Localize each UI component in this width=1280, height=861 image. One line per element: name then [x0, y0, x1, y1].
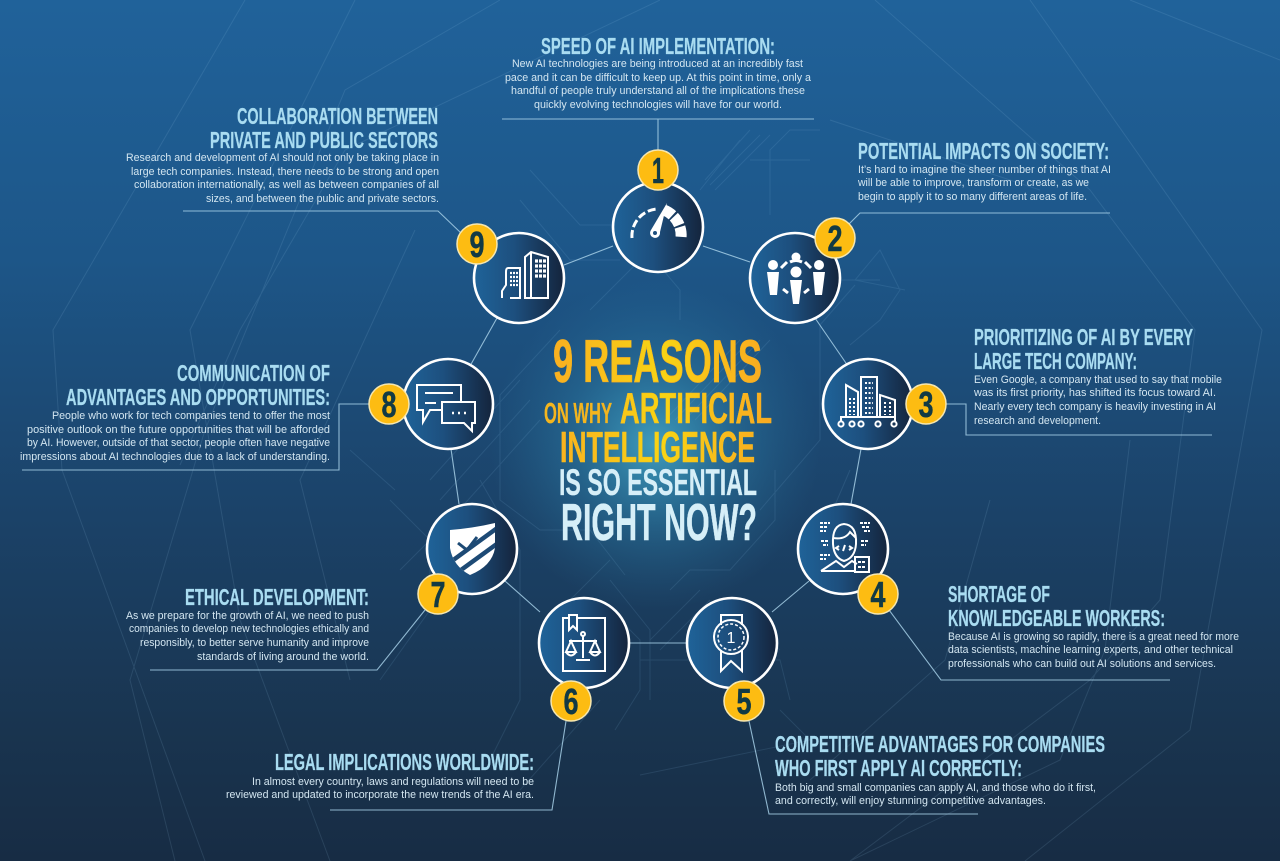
leader line 4 [889, 610, 1170, 680]
title: IS SO ESSENTIAL [559, 462, 757, 503]
leader line 5 [749, 721, 978, 814]
reason 8 text: communication of advantages: by AI. However, outside of that sector, people often have negative [27, 437, 330, 449]
leader line 2 [849, 213, 1110, 224]
reason 5 text: competitive advantages: COMPETITIVE ADVANTAGES FOR COMPANIES [775, 731, 1105, 757]
icon: award ribbon: 1 [727, 630, 736, 647]
reason 8 text: communication of advantages: ADVANTAGES AND OPPORTUNITIES: [66, 384, 330, 410]
reason 4 text: shortage of workers: professionals who can build out AI solutions and services. [948, 658, 1216, 670]
node 1: speedometer: 1 [652, 150, 664, 191]
reason 8 text: communication of advantages: COMMUNICATION OF [177, 360, 330, 386]
reason 5 text: competitive advantages: WHO FIRST APPLY AI CORRECTLY: [775, 755, 1022, 781]
node 5: medal [687, 598, 777, 722]
reason 2 text: potential impacts on society: POTENTIAL IMPACTS ON SOCIETY: [858, 138, 1109, 164]
reason 1 text: speed of AI implementation: pace and it can be difficult to keep up. At this point in time, only a [505, 72, 811, 84]
reason 5 text: competitive advantages: and correctly, will enjoy stunning competitive advantages. [775, 795, 1046, 807]
title: ON WHY [544, 398, 612, 430]
title: ARTIFICIAL [620, 384, 772, 433]
reason 4 text: shortage of workers: data scientists, machine learning experts, and other technical [948, 644, 1233, 656]
node 5: medal: 5 [736, 681, 752, 722]
reason 3 text: prioritizing of AI [973, 324, 1222, 427]
reason 7 text: ethical development: ETHICAL DEVELOPMENT: [185, 584, 369, 610]
leader line 3 [946, 404, 1212, 435]
reason 4 text: shortage of workers [948, 581, 1239, 670]
node 8: chat [369, 359, 493, 449]
reason 4 text: shortage of workers: Because AI is growing so rapidly, there is a great need for more [948, 631, 1239, 643]
node 7: shield [418, 504, 517, 615]
reason 2 text: potential impacts on society: will be able to improve, transform or create, as we [857, 177, 1089, 189]
title [544, 328, 772, 552]
node 6: law book: 6 [564, 681, 578, 722]
reason 8 text: communication of advantages: People who work for tech companies tend to offer the most [52, 410, 330, 422]
reason 9 text: collaboration: sizes, and between the public and private sectors. [206, 193, 439, 205]
reason 6 text: legal implications: LEGAL IMPLICATIONS WORLDWIDE: [275, 749, 534, 775]
reason 7 text: ethical development: responsibly, to better serve humanity and improve [140, 637, 369, 649]
leader line 6 [330, 721, 566, 810]
node 2: people: 2 [828, 218, 842, 259]
reason 3 text: prioritizing of AI: Nearly every tech company is heavily investing in AI [974, 401, 1216, 413]
icon: shield [450, 523, 495, 575]
title: INTELLIGENCE [560, 423, 755, 472]
reason 9 text: collaboration: COLLABORATION BETWEEN [237, 103, 438, 129]
icon: speech bubbles [417, 385, 475, 431]
reason 7 text: ethical development: companies to develop new technologies ethically and [129, 623, 369, 635]
icon: book and scales [563, 615, 605, 671]
reason 8 text: communication of advantages: impressions about AI technologies due to a lack of understanding. [20, 451, 330, 463]
node 7: shield: 7 [430, 574, 446, 615]
node 3: city [823, 359, 946, 449]
node 9: buildings: 9 [470, 224, 484, 265]
node 4: programmer [798, 504, 898, 615]
reason 1 text: speed of AI implementation: quickly evolving technologies will have for our world. [534, 99, 782, 111]
node 8: chat: 8 [382, 384, 396, 425]
node 3: city: 3 [918, 384, 934, 425]
reason 3 text: prioritizing of AI: Even Google, a company that used to say that mobile [974, 374, 1222, 386]
leader line 8 [22, 404, 369, 470]
reason 3 text: prioritizing of AI: research and development. [974, 415, 1101, 427]
reason 1 text: speed of AI implementation: SPEED OF AI IMPLEMENTATION: [541, 33, 775, 59]
reason 6 text: legal implications: reviewed and updated to incorporate the new trends of the AI era. [226, 789, 534, 801]
reason 1 text: speed of AI implementation: New AI technologies are being introduced at an incredibly fast [512, 58, 803, 70]
connectors between circles [451, 246, 861, 643]
reason 4 text: shortage of workers: SHORTAGE OF [948, 581, 1050, 607]
icon: smart city [838, 377, 897, 427]
node 2: people [750, 218, 855, 323]
reason 3 text: prioritizing of AI: was its first priority, has shifted its focus toward AI. [973, 387, 1216, 399]
node 6: law book [539, 598, 629, 722]
reason 3 text: prioritizing of AI: LARGE TECH COMPANY: [974, 348, 1137, 374]
reason 7 text: ethical development: As we prepare for the growth of AI, we need to push [126, 610, 369, 622]
reason 1 text: speed of AI implementation: handful of people truly understand all of the implications these [511, 85, 805, 97]
reason 9 text: collaboration: PRIVATE AND PUBLIC SECTORS [210, 127, 438, 153]
reason 8 text: communication of advantages: positive outlook on the future opportunities that will be afforded [27, 424, 330, 436]
reason 7 text: ethical development [126, 584, 369, 663]
leader line 9 [183, 211, 461, 233]
reason 5 text: competitive advantages [775, 731, 1105, 807]
reason 6 text: legal implications: In almost every country, laws and regulations will need to be [252, 776, 534, 788]
title: RIGHT NOW? [561, 494, 757, 552]
reason 8 text: communication of advantages [20, 360, 330, 463]
node 1: speedometer [613, 150, 703, 272]
reason 7 text: ethical development: standards of living around the world. [197, 651, 369, 663]
icon: team [767, 252, 825, 304]
reason 1 text: speed of AI implementation [505, 33, 811, 111]
node 4: programmer: 4 [870, 574, 886, 615]
reason 9 text: collaboration: Research and development of AI should not only be taking place in [126, 152, 439, 164]
icon: developer [820, 523, 870, 572]
reason 2 text: potential impacts on society: begin to apply it to so many different areas of life. [858, 191, 1087, 203]
node 9: buildings [457, 224, 564, 323]
reason 9 text: collaboration: large tech companies. Instead, there needs to be strong and open [131, 166, 439, 178]
reason 5 text: competitive advantages: Both big and small companies can apply AI, and those who do it first, [775, 782, 1096, 794]
leader line 1 [502, 119, 814, 150]
reason 9 text: collaboration: collaboration internationally, as well as between companies of all [134, 179, 439, 191]
title: 9 REASONS [553, 328, 762, 395]
icon: office buildings [502, 252, 548, 298]
reason 9 text: collaboration [126, 103, 439, 205]
reason 2 text: potential impacts on society: It’s hard to imagine the sheer number of things that AI [858, 164, 1111, 176]
reason 6 text: legal implications [226, 749, 534, 801]
icon: gauge [632, 203, 681, 238]
reason 2 text: potential impacts on society [857, 138, 1111, 203]
leader line 7 [150, 610, 425, 670]
